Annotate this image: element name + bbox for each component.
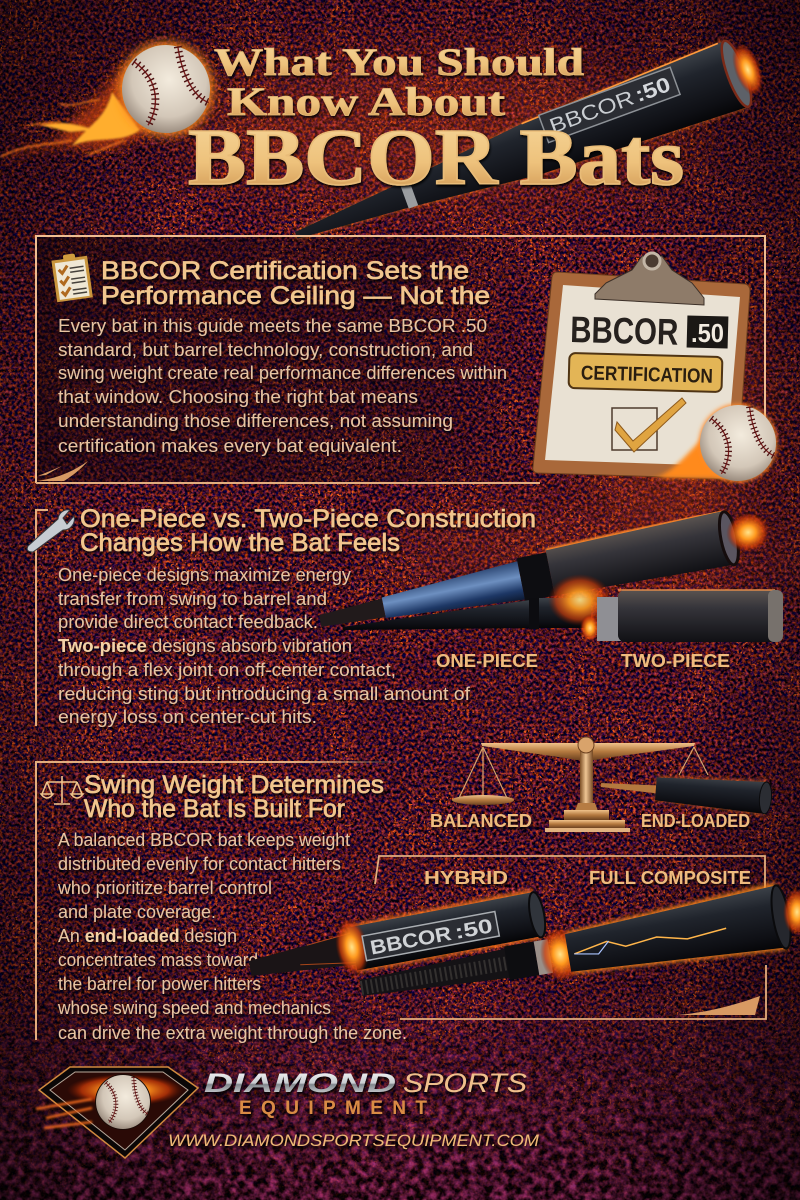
body text: through a flex joint on off-center contact, [58,659,396,680]
body text: swing weight create real performance differences within [58,362,507,383]
body text: understanding those differences, not assuming [58,410,453,431]
body text: concentrates mass toward [58,949,258,970]
body text: reducing sting but introducing a small amount of [58,683,471,704]
illustration: one-piece bat [315,503,775,646]
icon: scales [41,776,83,804]
panel: one-piece vs two-piece [27,503,783,727]
bat label: BBCOR [547,86,637,138]
heading: One-Piece vs. Two-Piece Construction [80,505,536,533]
body text: and plate coverage. [58,901,216,922]
heading: Swing Weight Determines [84,771,384,799]
bat label: :50 [632,73,674,107]
panel: swing weight [36,737,800,1043]
company name: SPORTS [403,1068,527,1098]
heading: Changes How the Bat Feels [80,529,400,557]
body text: whose swing speed and mechanics [57,997,331,1018]
heading: BBCOR Certification Sets the [101,257,469,285]
heading [101,257,490,310]
icon: checklist [51,252,93,302]
illustration: balance scale [452,737,708,832]
body text [58,315,507,456]
body text: Every bat in this guide meets the same BBCOR .50 [58,315,487,336]
heading [80,505,536,557]
illustration: full composite bat [355,881,794,1021]
panel: BBCOR certification [36,236,780,485]
label: two-piece: TWO-PIECE [621,651,730,671]
illustration: end-loaded bat [600,768,773,815]
body text [57,829,407,1043]
body text: the barrel for power hitters [58,973,261,994]
label: hybrid: HYBRID [424,868,508,888]
heading: Who the Bat Is Built For [84,795,345,823]
body text [58,564,471,727]
heading [84,771,384,823]
body text: can drive the extra weight through the zone. [58,1022,407,1043]
body text: transfer from swing to barrel and [58,588,327,609]
body text: distributed evenly for contact hitters [58,853,341,874]
title: BBCOR Bats [188,114,684,202]
label: full composite: FULL COMPOSITE [589,868,751,888]
footer logo [36,1067,540,1158]
label: one-piece: ONE-PIECE [436,651,538,671]
body text: who prioritize barrel control [57,877,272,898]
clipboard illustration: .50 [691,318,724,348]
title: What You Should [214,41,584,84]
clipboard illustration: CERTIFICATION [581,362,713,388]
company name: DIAMOND [204,1068,396,1098]
icon: wrench [27,510,74,552]
title [188,41,684,202]
website url: WWW.DIAMONDSPORTSEQUIPMENT.COM [168,1131,540,1150]
bat label [539,67,680,143]
label: end-loaded: END-LOADED [641,811,750,831]
bat label [362,911,499,961]
label: balanced: BALANCED [430,811,532,831]
icon: diamond with baseball [36,1067,198,1158]
illustration: hybrid bat [244,882,549,996]
body text: A balanced BBCOR bat keeps weight [58,829,350,850]
bat label: :50 [453,915,494,944]
body text: Two-piece designs absorb vibration [58,635,352,656]
bat label: BBCOR [368,923,454,960]
body text: certification makes every bat equivalent. [58,435,402,456]
body text: that window. Choosing the right bat means [58,386,418,407]
body text: An end-loaded design [58,925,237,946]
body text: provide direct contact feedback. [58,611,318,632]
illustration: two-piece bat [343,574,783,642]
company name: EQUIPMENT [239,1098,427,1119]
body text: One-piece designs maximize energy [58,564,352,585]
inner frame: bat material comparison [244,856,800,1021]
company name [204,1068,527,1119]
body text: standard, but barrel technology, construction, and [58,339,473,360]
body text: energy loss on center-cut hits. [58,706,317,727]
hero bat [284,32,772,268]
clipboard illustration: BBCOR [570,309,679,353]
heading: Performance Ceiling — Not the [101,282,490,310]
clipboard illustration [533,253,780,485]
hero baseball with flames [0,39,216,158]
title: Know About [227,79,506,124]
